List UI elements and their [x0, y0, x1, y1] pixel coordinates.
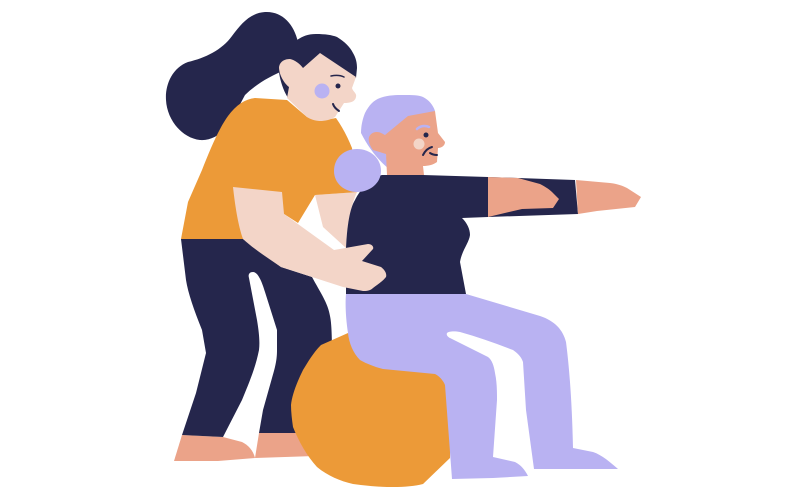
trainer back arm	[315, 192, 357, 248]
woman hair bun	[334, 149, 381, 192]
trainer leggings	[181, 239, 332, 437]
woman cheek	[414, 138, 424, 150]
trainer orange shirt	[181, 98, 358, 239]
woman mouth and wrinkle	[423, 147, 437, 155]
trainer cheek	[314, 84, 330, 98]
figure: trainer	[166, 12, 358, 461]
woman lilac trousers	[346, 294, 618, 479]
woman eye	[424, 132, 428, 138]
woman eyebrow	[417, 126, 429, 129]
trainer hair	[279, 34, 357, 98]
figure: senior woman	[334, 95, 641, 479]
woman hand	[576, 180, 641, 214]
woman face and neck	[369, 111, 445, 175]
woman forearm	[488, 177, 559, 217]
woman hair	[361, 95, 435, 168]
trainer shoes	[174, 433, 315, 461]
trainer ponytail	[166, 12, 298, 140]
woman navy top and sleeve	[346, 175, 578, 294]
exercise ball	[291, 333, 452, 487]
trainer face	[279, 53, 356, 121]
front shoe	[174, 435, 255, 461]
trainer front arm and hand	[233, 187, 386, 291]
back shoe	[255, 433, 315, 458]
trainer eyebrow	[331, 75, 344, 77]
trainer eye	[336, 84, 340, 88]
trainer mouth	[333, 104, 339, 111]
